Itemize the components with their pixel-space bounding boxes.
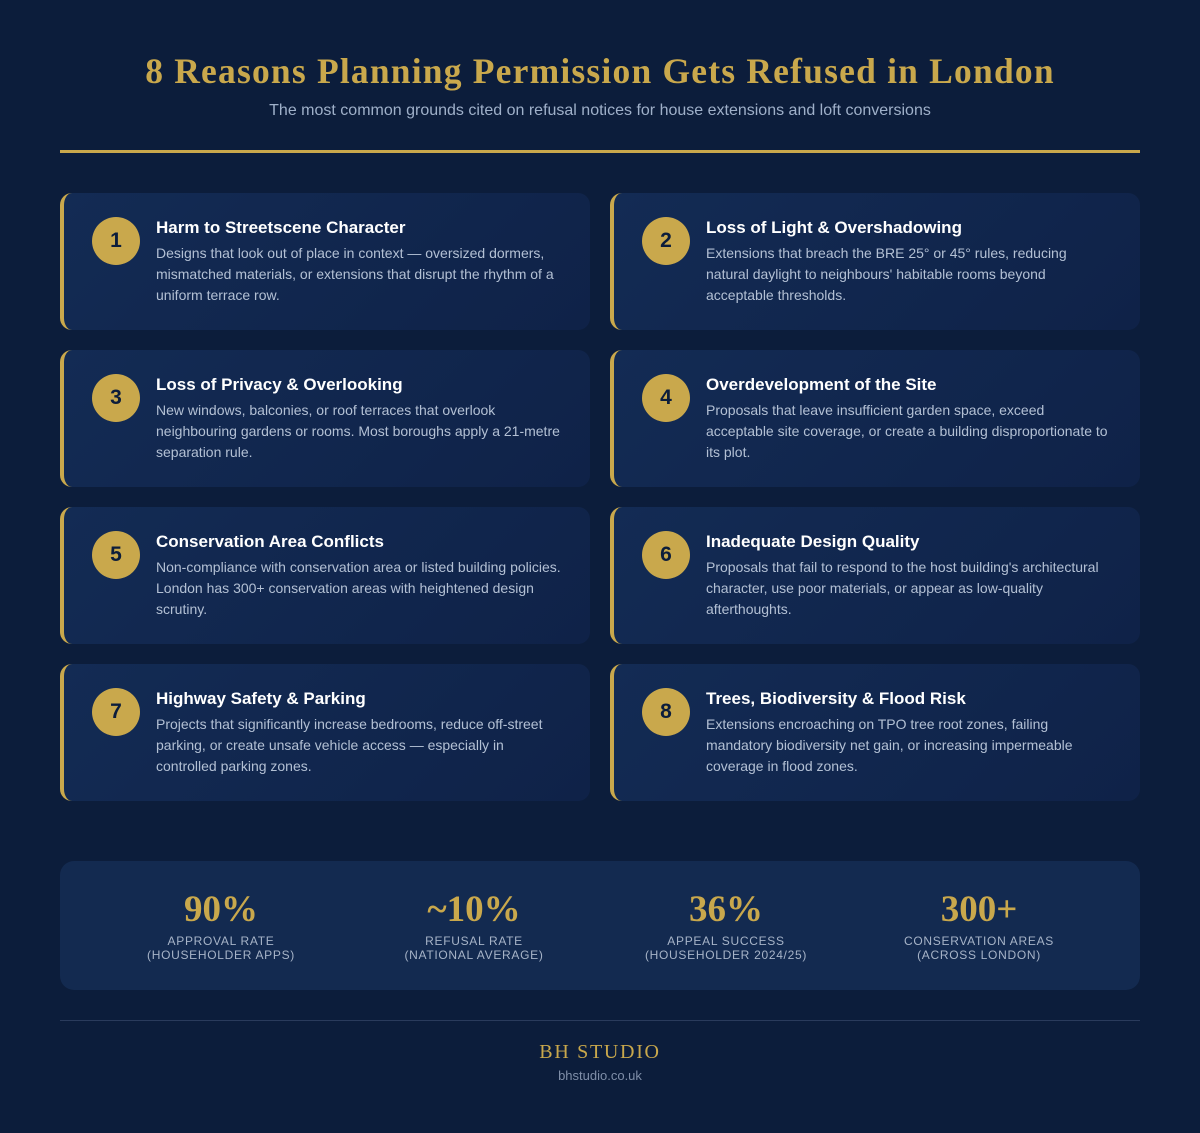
stats panel: ~10% — [427, 889, 521, 930]
card 1: Designs that look out of place in context — oversized dormers, mismatched materials, or extensions that disrupt the rhythm of a uniform terrace row. — [156, 245, 554, 303]
card 1 — [60, 193, 590, 330]
card 2: Loss of Light & Overshadowing — [706, 218, 962, 237]
card 3: Loss of Privacy & Overlooking — [156, 375, 403, 394]
card 2 — [610, 193, 1140, 330]
stats panel: APPROVAL RATE — [168, 934, 274, 948]
card 4: 4 — [660, 386, 672, 409]
card 6: 6 — [660, 543, 672, 566]
stats panel: REFUSAL RATE — [425, 934, 523, 948]
subtitle: The most common grounds cited on refusal notices for house extensions and loft conversions — [269, 102, 931, 119]
card 3: 3 — [110, 386, 122, 409]
card 4 — [610, 350, 1140, 487]
card 6 — [610, 507, 1140, 644]
title: 8 Reasons Planning Permission Gets Refused in London — [145, 51, 1055, 91]
stats panel: APPEAL SUCCESS — [667, 934, 785, 948]
card 7: 7 — [110, 700, 122, 723]
card 7: Projects that significantly increase bedrooms, reduce off-street parking, or create unsafe vehicle access — especially in controlled parking zones. — [156, 716, 542, 774]
stats panel: (NATIONAL AVERAGE) — [404, 948, 544, 962]
card 2: Extensions that breach the BRE 25° or 45° rules, reducing natural daylight to neighbours' habitable rooms beyond acceptable thresholds. — [706, 245, 1067, 303]
card 2: 2 — [660, 229, 672, 252]
stats panel — [60, 861, 1140, 990]
card 5: 5 — [110, 543, 122, 566]
card 8: Trees, Biodiversity & Flood Risk — [706, 689, 966, 708]
footer brand: BH STUDIO — [539, 1041, 661, 1063]
card 4: Proposals that leave insufficient garden space, exceed acceptable site coverage, or create a building disproportionate to its plot. — [706, 402, 1108, 460]
card 8: 8 — [660, 700, 672, 723]
card 6: Inadequate Design Quality — [706, 532, 920, 551]
card 3: New windows, balconies, or roof terraces that overlook neighbouring gardens or rooms. Most boroughs apply a 21-metre separation rule. — [156, 402, 560, 460]
card 7 — [60, 664, 590, 801]
stats panel: (HOUSEHOLDER 2024/25) — [645, 948, 807, 962]
stats panel: CONSERVATION AREAS — [904, 934, 1054, 948]
stats panel: (HOUSEHOLDER APPS) — [147, 948, 295, 962]
card 5: Non-compliance with conservation area or listed building policies. London has 300+ conservation areas with heightened design scrutiny. — [156, 559, 561, 617]
card 5 — [60, 507, 590, 644]
card 6: Proposals that fail to respond to the host building's architectural character, use poor materials, or appear as low-quality afterthoughts. — [706, 559, 1099, 617]
card 3 — [60, 350, 590, 487]
stats panel: 300+ — [941, 889, 1017, 930]
card 8 — [610, 664, 1140, 801]
card 1: 1 — [110, 229, 122, 252]
footer url: bhstudio.co.uk — [558, 1068, 642, 1083]
stats panel: (ACROSS LONDON) — [917, 948, 1041, 962]
stats panel: 36% — [689, 889, 763, 930]
card 5: Conservation Area Conflicts — [156, 532, 384, 551]
card 7: Highway Safety & Parking — [156, 689, 366, 708]
card 8: Extensions encroaching on TPO tree root zones, failing mandatory biodiversity net gain, or increasing impermeable coverage in flood zones. — [706, 716, 1073, 774]
stats panel: 90% — [184, 889, 258, 930]
card 4: Overdevelopment of the Site — [706, 375, 936, 394]
card 1: Harm to Streetscene Character — [156, 218, 405, 237]
